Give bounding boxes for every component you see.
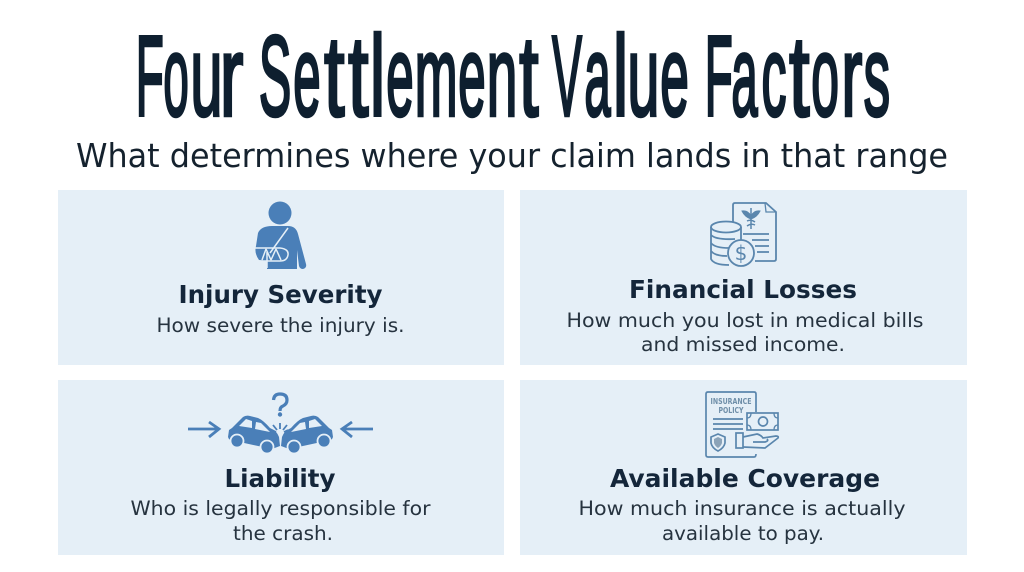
text: s — [864, 14, 890, 140]
heading: Available Coverage — [610, 464, 880, 493]
panel: liability — [58, 380, 504, 555]
description: How much insurance is actually — [578, 497, 906, 520]
title: e — [386, 14, 414, 140]
panel: financial losses — [520, 190, 967, 365]
title: e — [293, 14, 321, 140]
icon: colliding cars with arrows — [188, 394, 373, 454]
title: n — [487, 14, 517, 140]
title: F — [136, 14, 164, 140]
panel: liability: the crash. — [233, 522, 333, 545]
icon: injured person with sling — [255, 202, 306, 269]
icon: coins and medical bill: $ — [735, 241, 747, 265]
heading: Financial Losses — [629, 275, 857, 304]
panel: available coverage: available to pay. — [662, 522, 824, 545]
title: r — [220, 14, 243, 140]
title: t — [519, 14, 538, 140]
icon: coins and medical bill — [711, 203, 776, 266]
title: l — [613, 14, 628, 140]
description: How severe the injury is. — [156, 314, 404, 337]
panel: injury severity — [58, 190, 504, 365]
icon: insurance policy with cash and hand: INSURANCE — [710, 397, 752, 406]
panel: financial losses: and missed income. — [641, 333, 845, 356]
title: F — [705, 14, 733, 140]
title: t — [348, 14, 368, 140]
title — [136, 14, 890, 140]
description: Who is legally responsible for — [130, 497, 432, 520]
title: e — [660, 14, 689, 140]
title: t — [789, 14, 810, 140]
icon: insurance policy with cash and hand — [706, 392, 778, 457]
heading: Liability — [224, 464, 336, 493]
title: l — [370, 14, 385, 140]
title: u — [628, 14, 659, 140]
subtitle: What determines where your claim lands in that range — [76, 136, 948, 175]
title: t — [324, 14, 344, 140]
title: e — [458, 14, 486, 140]
title: r — [841, 14, 862, 140]
title: u — [190, 14, 222, 140]
title: o — [163, 14, 189, 140]
title: c — [762, 14, 786, 140]
panel: available coverage — [520, 380, 967, 555]
title: o — [811, 14, 839, 140]
title: a — [584, 14, 611, 140]
title: S — [259, 14, 291, 140]
title: a — [731, 14, 758, 140]
icon: insurance policy with cash and hand: POLICY — [718, 406, 744, 415]
heading: Injury Severity — [178, 280, 382, 309]
title: m — [415, 14, 458, 140]
description: How much you lost in medical bills — [566, 309, 924, 332]
title: V — [552, 14, 582, 140]
